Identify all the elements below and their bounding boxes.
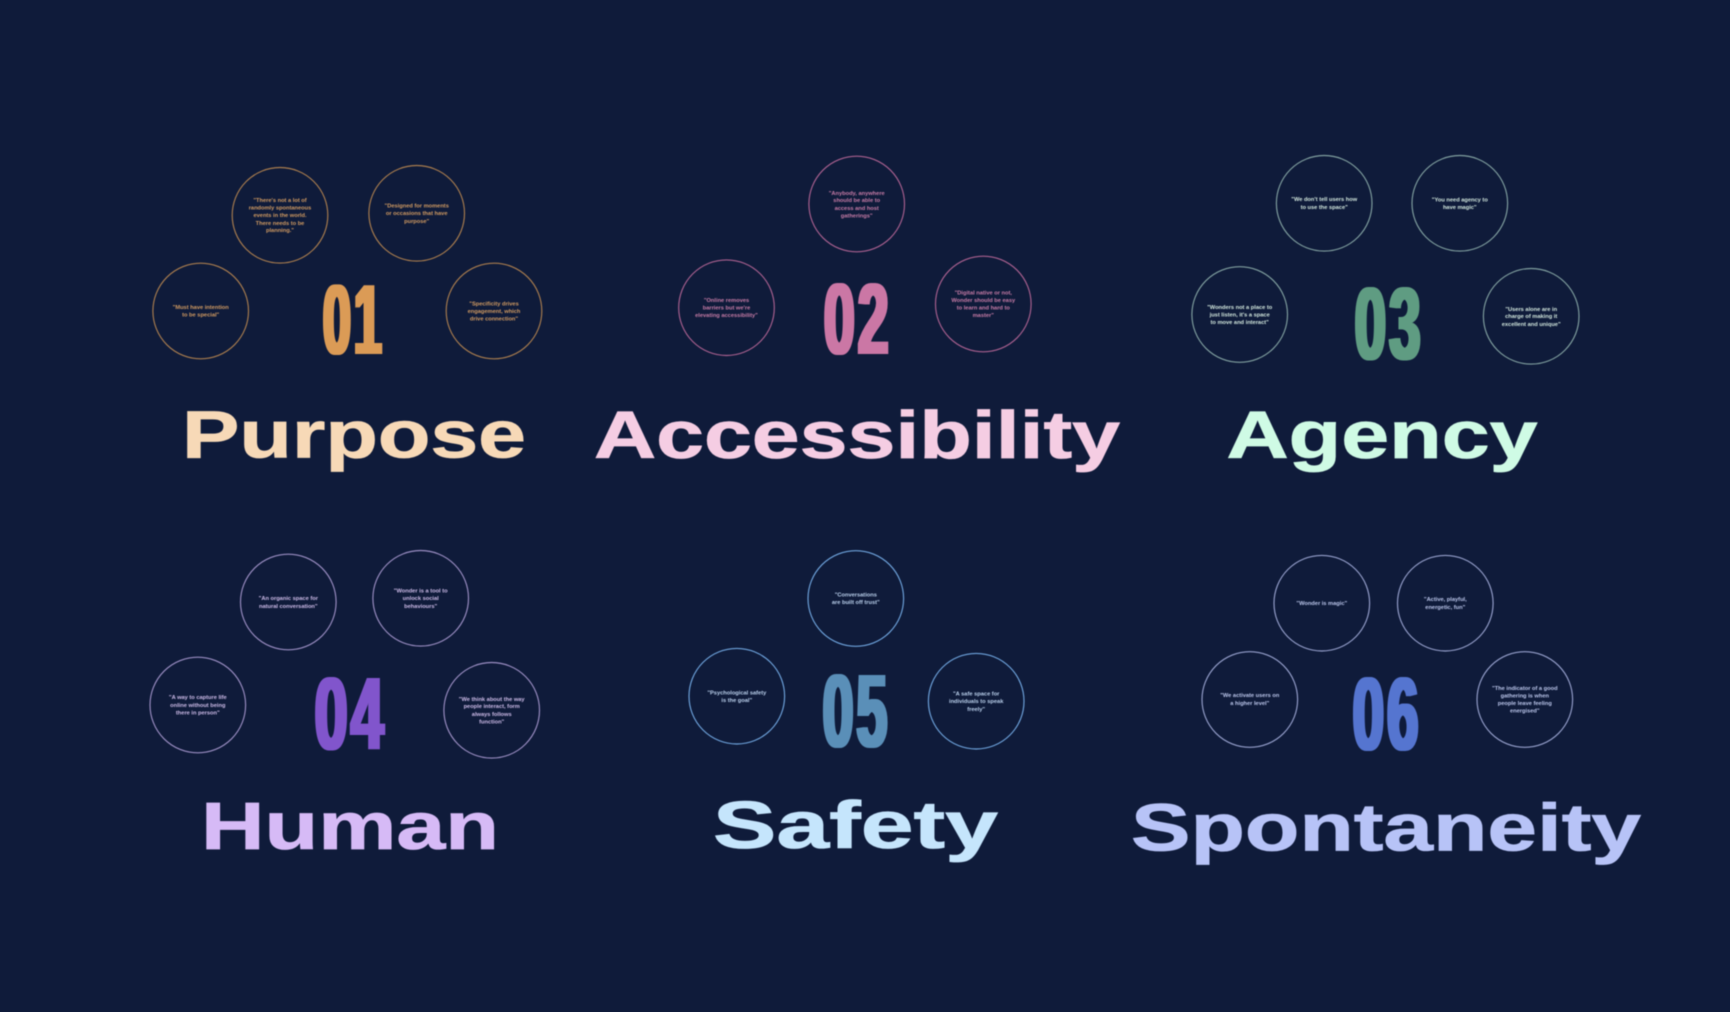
quote bubble: digital native or not: to learn and hard to xyxy=(957,305,1010,311)
quote bubble: users alone are in charge: charge of making it xyxy=(1505,314,1557,320)
quote bubble: users alone are in charge xyxy=(1483,268,1579,364)
quote bubble: designed for moments: purpose" xyxy=(404,219,430,225)
panel: 05 Safety xyxy=(689,551,1024,863)
quote bubble: conversations built off trust xyxy=(808,551,904,646)
quote bubble: online removes barriers xyxy=(679,260,774,356)
quote bubble: wonders not a place to just listen: to move and interact" xyxy=(1211,320,1269,326)
quote bubble: wonder is a tool xyxy=(373,550,469,646)
quote bubble: we activate users xyxy=(1202,652,1298,747)
quote bubble: not a lot of randomly spontaneous events: planning." xyxy=(266,228,294,234)
quote bubble: not a lot of randomly spontaneous events: There needs to be xyxy=(256,221,304,227)
quote bubble: a way to capture life online xyxy=(150,657,246,753)
quote bubble: an organic space: natural conversation" xyxy=(259,604,318,610)
quote bubble: we think about the way people interact xyxy=(444,662,540,758)
quote bubble: not a lot of randomly spontaneous events: events in the world. xyxy=(253,213,307,219)
number 03: 03 xyxy=(1355,267,1424,381)
quote bubble: we activate users: "We activate users on xyxy=(1220,693,1280,699)
quote bubble: users alone are in charge: excellent and unique" xyxy=(1502,322,1561,328)
quote bubble: wonder is magic xyxy=(1274,555,1370,651)
quote bubble: an organic space xyxy=(240,554,336,650)
quote bubble: online removes barriers: "Online removes xyxy=(704,298,749,304)
quote bubble: indicator of a good gathering: gathering is when xyxy=(1501,693,1549,699)
quote bubble: anybody, anywhere: "Anybody, anywhere xyxy=(829,191,885,197)
quote bubble: online removes barriers: barriers but we're xyxy=(703,305,750,311)
panel: 02 Accessibility xyxy=(594,156,1120,473)
quote bubble: anybody, anywhere xyxy=(809,156,904,252)
heading: Safety: Safety xyxy=(713,789,998,863)
quote bubble: you need agency: "You need agency to xyxy=(1432,197,1488,203)
heading: Human: Human xyxy=(201,790,499,864)
quote bubble: active, playful: "Active, playful, xyxy=(1424,597,1467,603)
quote bubble: a safe space: individuals to speak xyxy=(949,699,1004,705)
quote bubble: anybody, anywhere: gatherings" xyxy=(841,213,873,219)
quote bubble: designed for moments: "Designed for moments xyxy=(385,203,449,209)
quote bubble: wonder is a tool: "Wonder is a tool to xyxy=(394,588,448,594)
quote bubble: wonders not a place to just listen xyxy=(1192,267,1287,362)
quote bubble: wonder is a tool: unlock social xyxy=(403,596,439,602)
quote bubble: anybody, anywhere: access and host xyxy=(835,206,879,212)
quote bubble: specificity drives engagement xyxy=(446,263,542,359)
number 04: 04 xyxy=(315,657,387,771)
quote bubble: a safe space: "A safe space for xyxy=(953,691,1000,697)
quote bubble: specificity drives engagement: "Specificity drives xyxy=(469,301,519,307)
number 05: 05 xyxy=(823,653,890,769)
quote bubble: online removes barriers: elevating accessibility" xyxy=(695,313,758,319)
quote bubble: indicator of a good gathering: "The indicator of a good xyxy=(1492,686,1558,692)
quote bubble: conversations built off trust: "Conversations xyxy=(835,592,877,598)
quote bubble: wonders not a place to just listen: "Wonders not a place to xyxy=(1207,305,1273,311)
quote bubble: wonder is magic: "Wonder is magic" xyxy=(1296,601,1347,607)
quote bubble: digital native or not: "Digital native or not, xyxy=(955,290,1012,296)
quote bubble: a way to capture life online: "A way to capture life xyxy=(169,695,227,701)
quote bubble: active, playful: energetic, fun" xyxy=(1425,605,1466,611)
quote bubble: a way to capture life online: online without being xyxy=(170,703,226,709)
quote bubble: indicator of a good gathering xyxy=(1477,652,1573,747)
quote bubble: not a lot of randomly spontaneous events: "There's not a lot of xyxy=(253,198,307,204)
quote bubble: we don't tell users: "We don't tell users how xyxy=(1291,197,1358,203)
quote bubble: designed for moments xyxy=(369,166,465,261)
quote bubble: designed for moments: or occasions that have xyxy=(386,211,448,217)
quote bubble: indicator of a good gathering: energised" xyxy=(1510,708,1540,714)
quote bubble: specificity drives engagement: drive connection" xyxy=(470,316,518,322)
quote bubble: specificity drives engagement: engagement, which xyxy=(468,309,521,315)
quote bubble: wonders not a place to just listen: just listen, it's a space xyxy=(1209,312,1270,318)
heading: Accessibility: Accessibility xyxy=(594,399,1120,473)
quote bubble: you need agency: have magic" xyxy=(1443,205,1477,211)
panel: 03 Agency xyxy=(1192,156,1579,473)
panel: 01 Purpose xyxy=(153,166,542,472)
quote bubble: digital native or not: Wonder should be easy xyxy=(951,298,1016,304)
quote bubble: a way to capture life online: there in person" xyxy=(176,710,220,716)
quote bubble: must have intention: "Must have intention xyxy=(173,305,229,311)
quote bubble: we think about the way people interact: "We think about the way xyxy=(459,697,525,703)
quote bubble: a safe space xyxy=(928,653,1024,749)
quote bubble: we think about the way people interact: people interact, form xyxy=(464,704,520,710)
quote bubble: must have intention xyxy=(153,263,248,359)
quote bubble: indicator of a good gathering: people leave feeling xyxy=(1498,701,1552,707)
quote bubble: not a lot of randomly spontaneous events: randomly spontaneous xyxy=(249,205,311,211)
quote bubble: psychological safety: is the goal" xyxy=(721,698,753,704)
panel: 06 Spontaneity xyxy=(1131,555,1641,866)
quote bubble: wonder is a tool: behaviours" xyxy=(404,604,438,610)
quote bubble: we don't tell users xyxy=(1276,156,1372,251)
panel: 04 Human xyxy=(150,550,540,864)
quote bubble: psychological safety xyxy=(689,648,785,744)
quote bubble: not a lot of randomly spontaneous events xyxy=(232,168,328,263)
quote bubble: digital native or not: master" xyxy=(973,313,994,319)
number 06: 06 xyxy=(1353,657,1422,772)
heading: Purpose: Purpose xyxy=(182,398,526,472)
quote bubble: anybody, anywhere: should be able to xyxy=(833,198,881,204)
quote bubble: an organic space: "An organic space for xyxy=(259,596,319,602)
quote bubble: digital native or not xyxy=(936,256,1031,352)
quote bubble: we don't tell users: to use the space" xyxy=(1301,205,1348,211)
quote bubble: psychological safety: "Psychological safety xyxy=(707,690,767,696)
quote bubble: we think about the way people interact: always follows xyxy=(472,712,512,718)
quote bubble: active, playful xyxy=(1398,555,1493,651)
number 02: 02 xyxy=(824,264,892,376)
quote bubble: must have intention: to be special" xyxy=(182,312,220,318)
quote bubble: conversations built off trust: are built off trust" xyxy=(832,600,880,606)
heading: Agency: Agency xyxy=(1226,399,1538,473)
quote bubble: a safe space: freely" xyxy=(967,707,985,713)
quote bubble: we think about the way people interact: function" xyxy=(479,719,505,725)
number 01: 01 xyxy=(323,266,385,375)
heading: Spontaneity: Spontaneity xyxy=(1131,792,1641,866)
quote bubble: you need agency xyxy=(1412,156,1508,251)
quote bubble: users alone are in charge: "Users alone are in xyxy=(1505,307,1558,313)
quote bubble: we activate users: a higher level" xyxy=(1230,701,1270,707)
